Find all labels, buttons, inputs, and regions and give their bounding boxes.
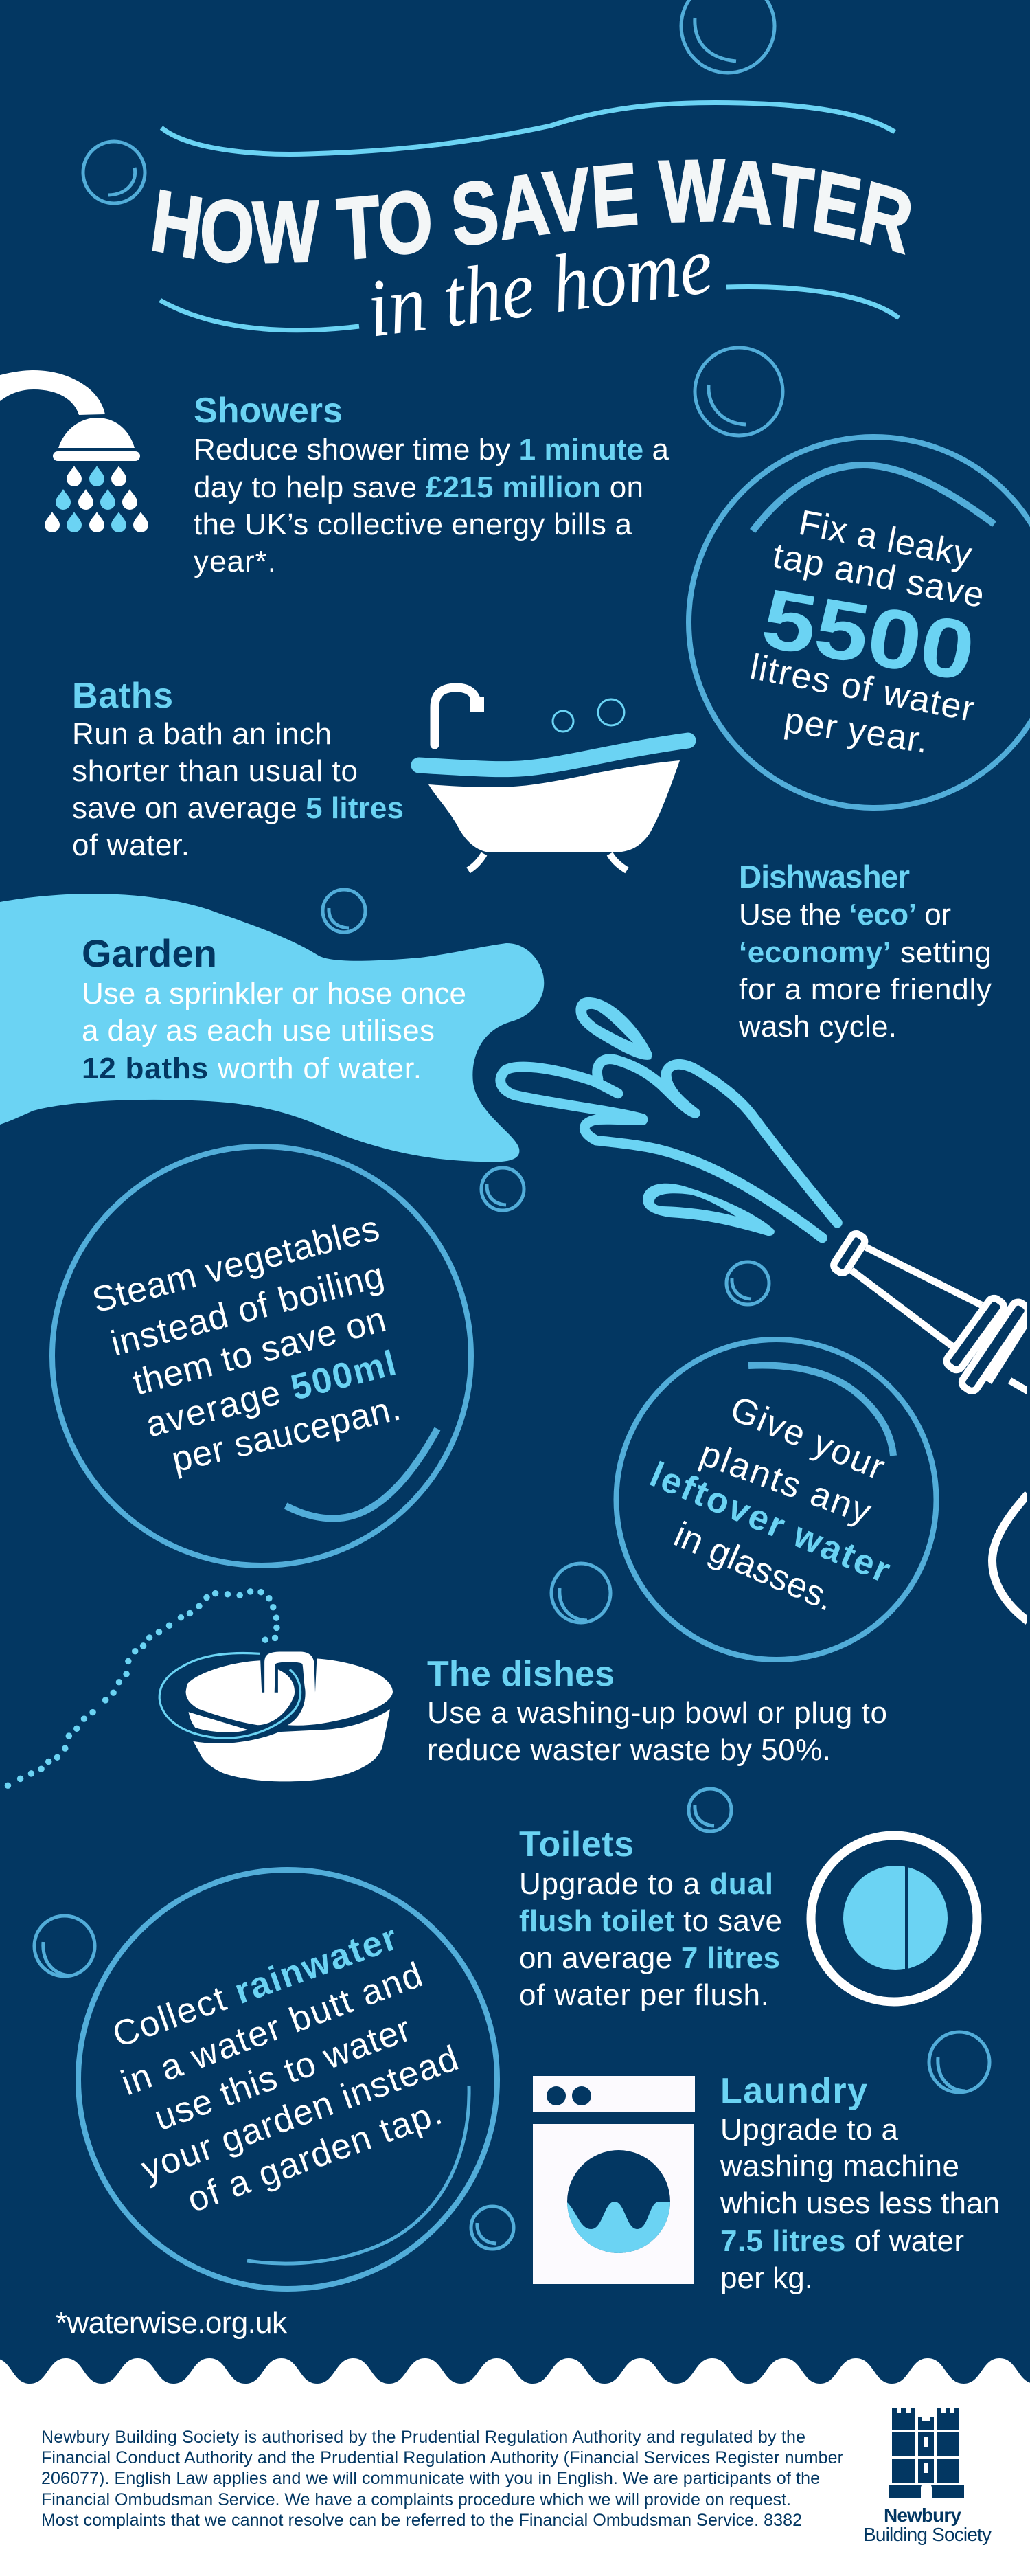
callout: rainwater: use this to water [149, 2009, 415, 2138]
panel: baths [72, 676, 404, 862]
callout: steam vegetables: Steam vegetables [88, 1208, 383, 1321]
logo: wordmark: Newbury [884, 2505, 961, 2526]
icon: hose spray [501, 997, 1030, 1393]
text: dishwasher body: wash cycle. [738, 1010, 897, 1043]
icon: shower [0, 370, 148, 532]
logo: wordmark [863, 2505, 992, 2545]
callout: rainwater: in a water butt and [116, 1955, 428, 2103]
callout: rainwater: your garden instead [136, 2038, 464, 2189]
text: garden body: Use a sprinkler or hose once [82, 977, 466, 1010]
callout: leftover water: Give your [724, 1389, 891, 1488]
text: laundry body: 7.5 litres of water [720, 2224, 964, 2258]
text: garden body [82, 977, 466, 1085]
text: garden body: 12 baths worth of water. [82, 1052, 422, 1085]
text: showers body: day to help save £215 million on [194, 471, 643, 504]
callout: leftover water: in glasses. [668, 1515, 840, 1619]
panel: showers [194, 391, 670, 578]
heading: baths: Baths [72, 676, 173, 716]
icon: bath [419, 688, 688, 870]
heading: the dishes: The dishes [427, 1654, 615, 1694]
panel: garden water splash [0, 894, 544, 1162]
bubble: above fix a leaky [695, 348, 783, 436]
text: garden body: a day as each use utilises [82, 1014, 435, 1048]
text: toilets body: on average 7 litres [519, 1941, 780, 1975]
panel: laundry [720, 2071, 1000, 2295]
title wave: lower left [160, 300, 359, 330]
text: dishwasher body: for a more friendly [739, 973, 992, 1006]
text: laundry body [720, 2113, 1000, 2295]
callout: leftover water: leftover water [644, 1455, 896, 1591]
text: laundry body: which uses less than [720, 2187, 1000, 2220]
text: dishwasher body: ‘economy’ setting [739, 936, 992, 969]
callout: rainwater: of a garden tap. [182, 2092, 447, 2220]
text: baths body: shorter than usual to [72, 754, 358, 788]
text: dishwasher body: Use the ‘eco’ or [739, 898, 951, 931]
wave edge [0, 2358, 1030, 2576]
text: dishwasher body [738, 898, 992, 1043]
heading: garden: Garden [82, 931, 217, 975]
callout: leftover water: plants any [695, 1434, 876, 1532]
legal text: Newbury Building Society is authorised by the Prudential Regulation Authority and regulated by the [41, 2428, 805, 2447]
logo: wordmark: Building Society [863, 2524, 992, 2545]
text: dishes body: reduce waster waste by 50%. [427, 1733, 831, 1767]
icon: washing machine [533, 2076, 695, 2284]
spray droplets [575, 997, 652, 1060]
callout: fix a leaky tap [689, 437, 1030, 808]
text: laundry body: Upgrade to a [720, 2113, 899, 2147]
title: how to save water: HOW TO SAVE WATER [152, 159, 911, 264]
legal text: 206077). English Law applies and we will communicate with you in English. We are participants of the [41, 2469, 820, 2488]
text: toilets body: Upgrade to a dual [519, 1867, 773, 1901]
title wave: lower right [726, 287, 899, 318]
bubble: above laundry [929, 2032, 989, 2092]
plug chain dots [5, 1588, 280, 1789]
legal text [41, 2428, 843, 2530]
heading: dishwasher: Dishwasher [739, 859, 910, 894]
text: toilets body [519, 1867, 782, 2012]
callout: steam vegetables [52, 1146, 471, 1566]
callout: fix a leaky tap: 5500 [756, 572, 981, 699]
heading: laundry: Laundry [720, 2071, 867, 2111]
lower droplet [643, 1184, 775, 1236]
icon: bowl and plug [5, 1588, 393, 1789]
hose nozzle [832, 1232, 1030, 1393]
title block [152, 100, 911, 354]
callout: steam vegetables: them to save on [128, 1300, 390, 1403]
text: laundry body: washing machine [720, 2149, 959, 2183]
callout: steam vegetables: per saucepan. [168, 1388, 404, 1480]
callout: fix a leaky tap: tap and save [770, 536, 987, 615]
bubble: top [681, 0, 775, 73]
icon: dual flush button [811, 1835, 977, 2002]
panel: the dishes [427, 1654, 887, 1767]
text: toilets body: of water per flush. [519, 1978, 769, 2012]
title wave: top [161, 102, 895, 154]
legal text: Financial Conduct Authority and the Prudential Regulation Authority (Financial Services Register number [41, 2448, 843, 2467]
text: showers body: Reduce shower time by 1 minute a [194, 433, 670, 466]
callout: rainwater: Collect rainwater [108, 1918, 402, 2055]
footer panel [0, 2358, 1030, 2576]
text: showers body: year*. [194, 545, 276, 578]
panel: toilets [519, 1824, 782, 2012]
bubble: below splash [481, 1168, 524, 1210]
bowl [159, 1652, 393, 1781]
text: showers body [194, 433, 670, 578]
bubble: beside title [83, 142, 145, 203]
bubble: left of rainwater [34, 1916, 95, 1976]
source note: *waterwise.org.uk [56, 2306, 288, 2340]
bubble: above garden [323, 890, 365, 932]
text: baths body: save on average 5 litres [72, 791, 404, 825]
text: baths body: of water. [72, 828, 190, 862]
bubble: above toilets [689, 1789, 731, 1831]
shape: water splash [0, 894, 544, 1162]
callout: rainwater [78, 1870, 497, 2289]
panel: dishwasher [738, 859, 992, 1043]
callout: fix a leaky tap: Fix a leaky [796, 503, 975, 575]
subtitle: in the home: in the home [362, 218, 718, 354]
text: baths body [72, 717, 404, 862]
text: dishes body [427, 1696, 887, 1767]
spray streams [501, 1059, 837, 1238]
text: baths body: Run a bath an inch [72, 717, 332, 751]
text: laundry body: per kg. [720, 2261, 813, 2295]
callout: fix a leaky tap: per year. [781, 701, 930, 761]
bubble: right of rainwater [471, 2206, 514, 2249]
callout: steam vegetables: average 500ml [142, 1343, 400, 1445]
bubble: near dishes [551, 1563, 610, 1623]
text: showers body: the UK’s collective energy bills a [194, 508, 632, 541]
callout: leftover water [617, 1340, 937, 1660]
icon: plant curve at right edge [992, 1494, 1028, 1621]
heading: showers: Showers [194, 391, 343, 431]
text: toilets body: flush toilet to save [519, 1904, 782, 1938]
text: dishes body: Use a washing-up bowl or plug to [427, 1696, 887, 1730]
legal text: Most complaints that we cannot resolve can be referred to the Financial Ombudsman Service. 8382 [41, 2511, 802, 2530]
callout: fix a leaky tap: litres of water [747, 647, 978, 730]
legal text: Financial Ombudsman Service. We have a complaints procedure which we will provide on request. [41, 2490, 791, 2509]
heading: toilets: Toilets [519, 1824, 634, 1864]
logo: castle [889, 2408, 964, 2498]
callout: steam vegetables: instead of boiling [106, 1255, 388, 1364]
bubble: below hose [726, 1262, 769, 1304]
